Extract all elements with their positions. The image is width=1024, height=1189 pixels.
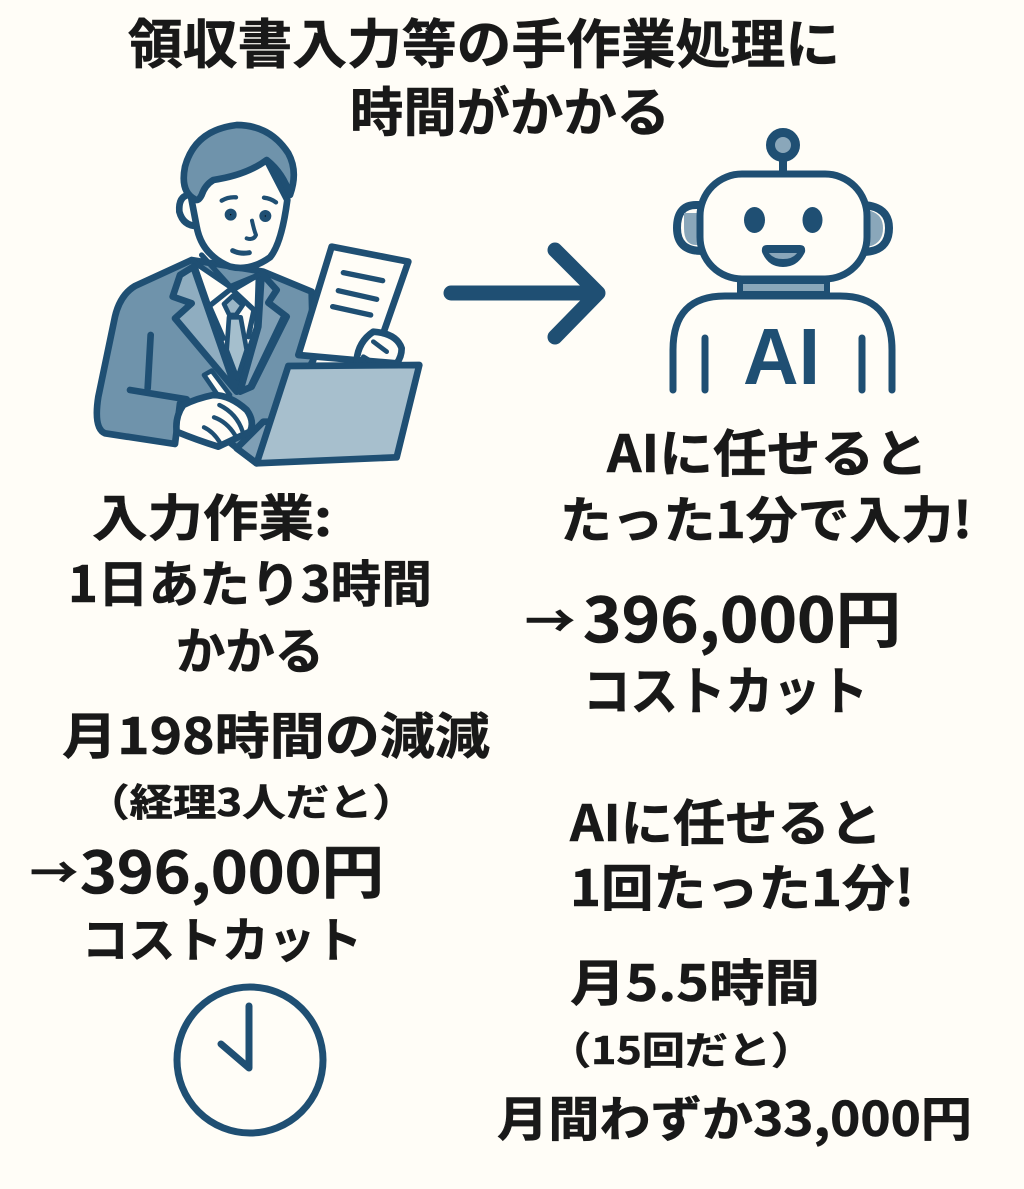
text block: AI per session: 1回たった1分! [570,849,914,921]
text block: AI monthly hours [548,944,820,1075]
text block: AI cost cut: 396,000円 [583,570,901,660]
tie [224,296,243,315]
face [190,160,287,268]
AI label: AI [743,312,820,401]
eyebrows [222,197,276,202]
suit body [97,260,313,463]
title: 領収書入力等の手作業処理に [128,3,840,79]
text block: AI per session [569,784,914,921]
text block: manual cost cut [30,826,384,971]
text block: manual input time: かかる [176,612,324,684]
text block: manual input time: 1日あたり3時間 [68,545,432,617]
text block: AI entry time: AIに任せると [606,413,928,487]
icon: clock [177,987,323,1133]
pen [204,371,230,398]
left ear [677,205,702,251]
text block: monthly hours: （経理3人だと） [86,772,416,827]
text block: AI cost cut [525,570,901,725]
shirt [193,262,258,387]
text block: AI cost cut: コストカット [583,650,868,725]
text block: monthly hours: 月198時間の減減 [62,697,490,769]
collar lines [202,255,258,338]
nose [247,221,256,239]
text block: manual input time: 入力作業: [92,479,332,551]
title [128,3,840,147]
text block: AI per session: AIに任せると [569,784,882,856]
torso [673,296,892,390]
head [700,174,867,279]
neck [740,281,827,294]
mouth [233,251,249,253]
text block: AI entry time: たった1分で入力! [560,481,972,553]
title: 時間がかかる [350,71,670,147]
laptop [237,422,272,463]
mouth [762,245,805,267]
text block: AI monthly cost: 月間わずか33,000円 [497,1080,972,1150]
arm lines [130,335,187,399]
upper hand [357,332,402,363]
text block: manual cost cut: コストカット [82,901,362,971]
lapels [173,267,237,392]
text block: AI monthly hours: 月5.5時間 [570,944,820,1016]
eyes [744,207,765,233]
document [298,247,408,362]
text block: monthly hours [62,697,490,827]
hair [184,125,294,200]
antenna [770,132,796,158]
icon: businessman with document and laptop [97,125,419,463]
text block: AI entry time [560,413,972,553]
arrow [451,250,598,337]
right ear [864,205,889,252]
ear [179,195,198,226]
text block: AI monthly hours: （15回だと） [548,1020,814,1075]
text block: AI cost cut: → [525,586,575,650]
text block: manual cost cut: → [30,840,78,901]
writing hand [176,395,252,447]
text block: manual cost cut: 396,000円 [80,826,384,910]
document lines [333,273,383,315]
torso lines [705,338,862,390]
icon: AI robot [673,132,892,401]
text block: manual input time [68,479,432,684]
eyes [228,212,233,217]
